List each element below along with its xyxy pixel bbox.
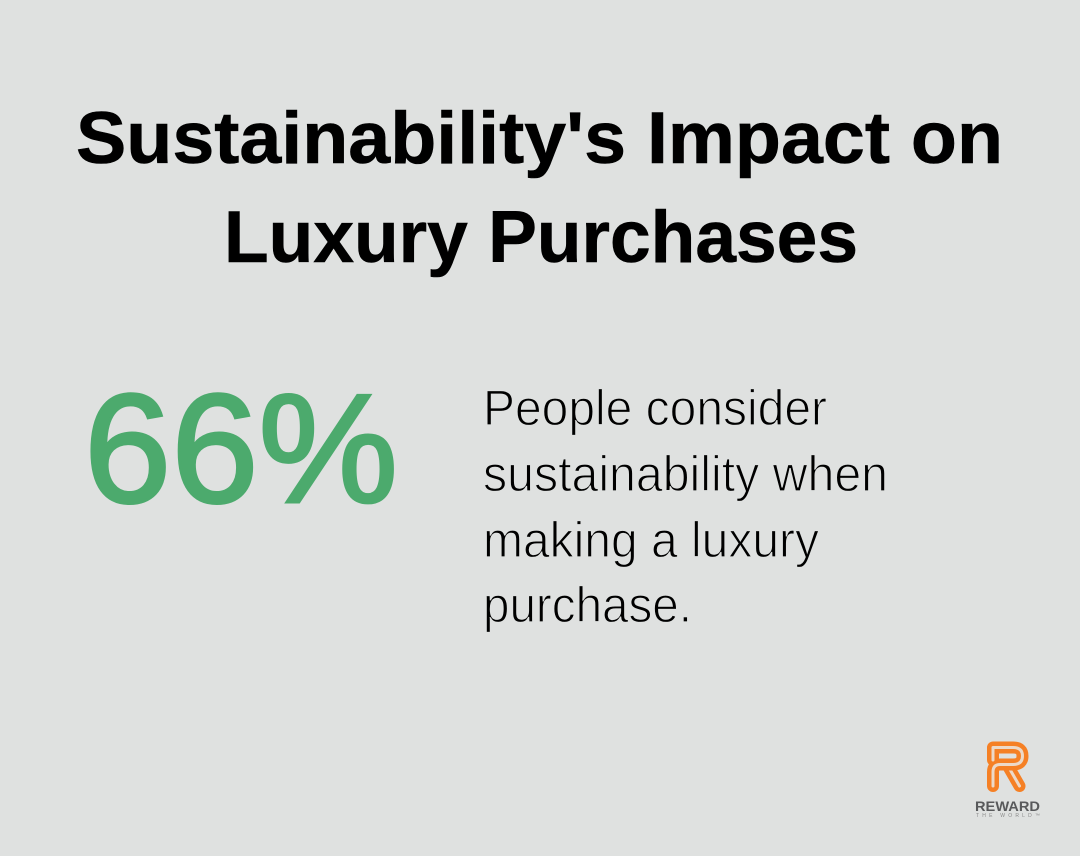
logo wordmark: REWARD (975, 798, 1040, 814)
icon: R mark (993, 748, 1022, 786)
description text: People consider (483, 380, 827, 436)
description text: making a luxury (483, 512, 819, 568)
description text: sustainability when (483, 446, 888, 502)
logo tagline: THE WORLD™ (976, 813, 1040, 819)
title: Sustainability's Impact on (76, 98, 1003, 179)
title: Luxury Purchases (224, 197, 858, 278)
statistic: 66%: 66% (84, 362, 398, 535)
logo: Reward the World (975, 748, 1040, 819)
title (76, 98, 1003, 278)
description text: purchase. (483, 577, 692, 633)
description text (483, 380, 888, 633)
